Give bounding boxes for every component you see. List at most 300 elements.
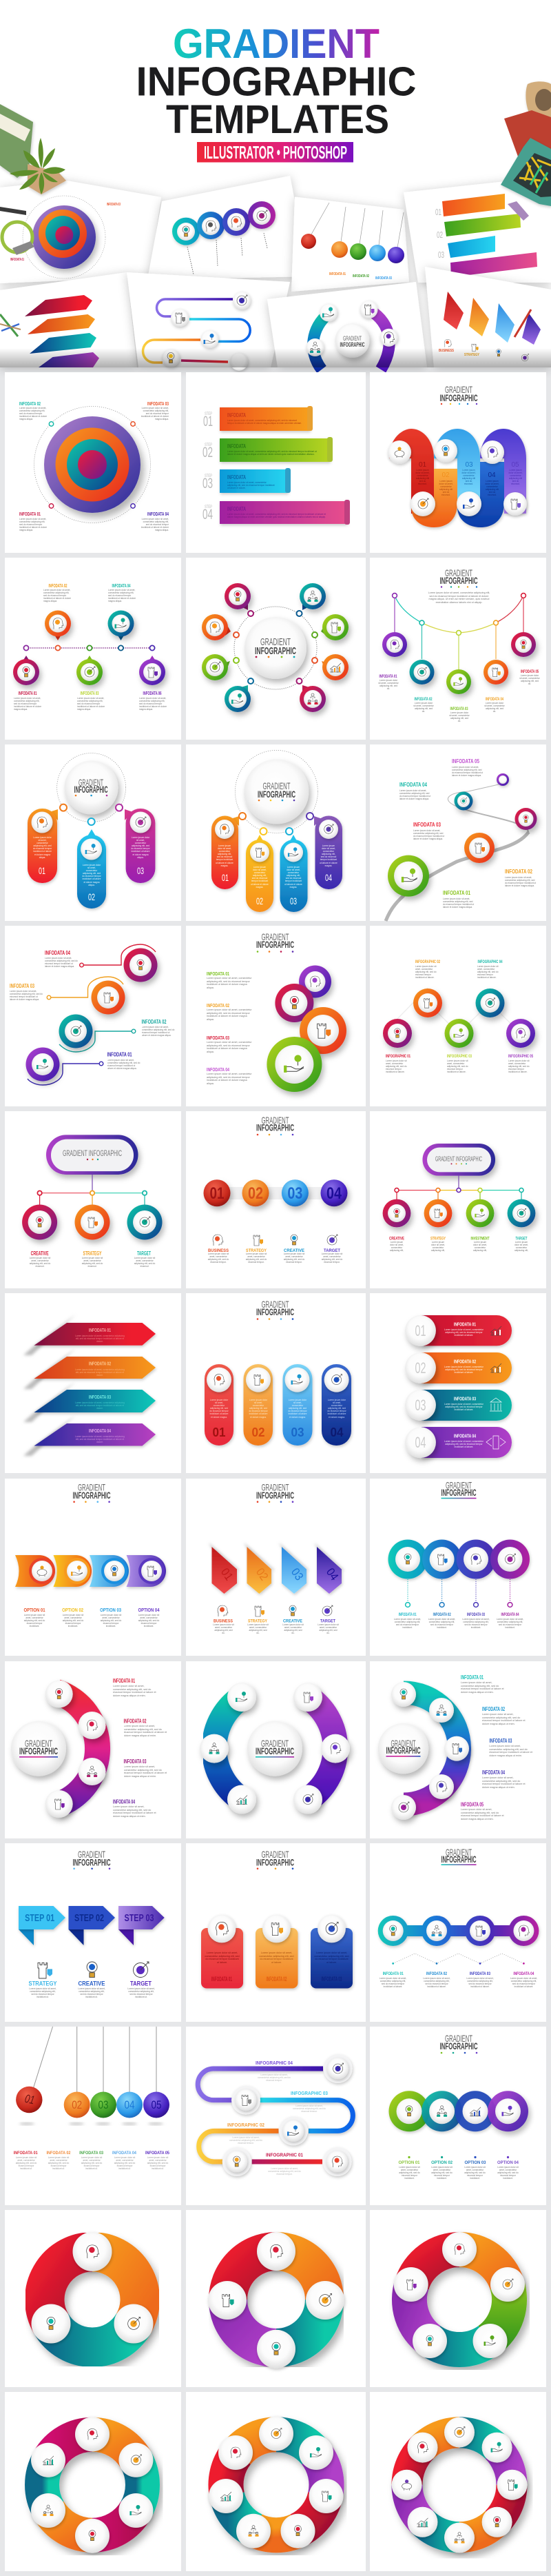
cylinder 04 bbox=[127, 1555, 166, 1587]
label 04 bbox=[141, 512, 169, 532]
box 02: Lorem ipsum dolor sit amet, consectetur adipiscing elit, sed do eiusmod tempor incididunt ut labore. bbox=[259, 1951, 294, 1963]
panel: stair circles bbox=[5, 926, 181, 1106]
heading: GRADIENT bbox=[262, 1299, 289, 1310]
sphere 05: 05 bbox=[152, 2098, 161, 2111]
template sheet: folded tags: BUSINESS bbox=[439, 349, 455, 353]
box 01: Lorem ipsum dolor sit amet, consectetur adipiscing elit, sed do eiusmod tempor incididunt ut labore. bbox=[205, 1951, 240, 1963]
label 02 bbox=[505, 869, 537, 891]
label 04: Lorem ipsum dolor sit amet, consectetur adipiscing elit, sed do eiusmod tempor. bbox=[258, 2073, 291, 2082]
arc band bbox=[56, 1692, 98, 1805]
ball 04 bbox=[324, 2054, 353, 2083]
label 01: INFODATA 01 bbox=[383, 1971, 404, 1976]
center ball: GRADIENT bbox=[391, 1738, 416, 1749]
inner ball 04 bbox=[495, 2098, 521, 2124]
heading: GRADIENT bbox=[78, 1482, 105, 1493]
capsule 01 bbox=[205, 1364, 233, 1446]
step 05 ball bbox=[481, 440, 504, 464]
label 03: INFODATA 03 bbox=[467, 1613, 485, 1617]
label option 03: Lorem ipsum dolor sit amet, consectetur adipiscing elit, sed do eiusmod tempor incididunt. bbox=[101, 1614, 121, 1627]
hub ball bbox=[65, 761, 118, 815]
ball 02 bbox=[413, 988, 442, 1017]
nodes bbox=[239, 813, 313, 835]
sphere 03 bbox=[282, 1179, 309, 1206]
template sheet: angled arrows bbox=[0, 272, 137, 367]
circle 04 bbox=[488, 2091, 528, 2131]
band numbers: 05 bbox=[511, 461, 519, 469]
panel: road path bbox=[370, 744, 546, 921]
template sheet: circle chain bbox=[147, 176, 309, 280]
label 03: INFODATA 03 bbox=[413, 822, 441, 828]
label 06: Lorem ipsum dolor sit amet, consectetur adipiscing elit, sed do eiusmod tempor incididunt ut labore et dolore magna aliqua. bbox=[139, 697, 167, 711]
label 03: Lorem ipsum dolor sit amet, consectetur adipiscing elit, sed do eiusmod tempor incididunt ut labore et dolore magna aliqua. bbox=[413, 829, 444, 840]
row 04: INFODATA 04 bbox=[454, 1434, 476, 1439]
label 02: Lorem ipsum dolor sit amet, consectetur adipiscing elit, sed do. bbox=[413, 702, 434, 713]
donut segments bbox=[409, 2250, 510, 2350]
pill 02 bbox=[246, 835, 273, 912]
label 02: INFODATA 02 bbox=[433, 1613, 451, 1617]
panel: four spheres bbox=[186, 1111, 366, 1288]
panel: ring chain with drops bbox=[370, 1479, 546, 1656]
label 05: INFODATA 05 bbox=[461, 1802, 484, 1807]
capsule 02: 02 bbox=[252, 1426, 264, 1439]
column creative: Lorem ipsum dolor sit amet, consectetur adipiscing elit, sed do. bbox=[282, 1623, 304, 1634]
nodes bbox=[37, 1191, 147, 1195]
panel: folded tags bbox=[186, 1479, 366, 1656]
path segment 03 bbox=[260, 2100, 353, 2131]
label 04: Lorem ipsum dolor sit amet, consectetur adipiscing elit, sed do eiusmod tempor incididunt ut labore et dolore magna aliqua. bbox=[45, 957, 78, 968]
label 03: Lorem ipsum dolor sit amet, consectetur adipiscing elit, sed do eiusmod tempor incididunt ut labore et dolore magna aliqua ut enim. bbox=[124, 1765, 167, 1777]
template sheet: pendulum: INFODATA 03 bbox=[375, 276, 392, 281]
ribbon 04 bbox=[202, 500, 350, 525]
label 03: INFODATA 03 bbox=[450, 707, 468, 711]
panel: org chart four bbox=[370, 1111, 546, 1288]
ball 02 bbox=[279, 2116, 308, 2145]
inner ball 02 bbox=[429, 2098, 455, 2124]
arrow step 01: STEP 01 bbox=[25, 1912, 54, 1924]
label 05: Lorem ipsum dolor sit amet, consectetur adipiscing elit, sed do eiusmod tempor incididunt ut labore et dolore magna aliqua ut enim. bbox=[461, 1808, 504, 1820]
capsule 03: Lorem ipsum dolor sit amet, consectetur adipiscing elit, sed do eiusmod tempor incididunt ut labore et dolore magna. bbox=[288, 1399, 307, 1419]
band numbers: 03 bbox=[465, 461, 473, 469]
panel: half ring five bbox=[370, 1661, 546, 1838]
ball 6 bbox=[293, 1785, 322, 1814]
pill 02: 02 bbox=[256, 895, 263, 906]
label 02: Lorem ipsum dolor sit amet, consectetur adipiscing elit, sed do eiusmod tempor incididunt ut labore et dolore magna aliqua ut enim. bbox=[124, 1725, 167, 1737]
label 01 bbox=[386, 1055, 410, 1076]
label 03: INFODATA 03 bbox=[79, 2151, 104, 2156]
column target: Lorem ipsum dolor sit amet, consectetur adipiscing elit, sed do eiusmod tempor incididunt ut. bbox=[127, 1987, 155, 1998]
row 01: Lorem ipsum dolor sit amet, consectetur adipiscing elit, sed do eiusmod tempor incididunt ut labore. bbox=[444, 1328, 484, 1337]
arrow step 01 bbox=[19, 1906, 65, 1945]
label 04: Lorem ipsum dolor sit amet, consectetur adipiscing elit, sed do eiusmod tempor incididunt ut labore et dolore magna aliqua. bbox=[108, 589, 136, 602]
label option 04: Lorem ipsum dolor sit amet, consectetur adipiscing elit, sed do eiusmod tempor incididunt. bbox=[138, 1614, 159, 1627]
arrow 04: INFODATA 04 bbox=[89, 1429, 111, 1434]
ball 02 bbox=[79, 1712, 106, 1739]
bottom fade bbox=[0, 348, 551, 367]
label option 03: OPTION 03 bbox=[464, 2160, 486, 2165]
column business: Lorem ipsum dolor sit amet, consectetur adipiscing elit, sed do eiusmod tempor. bbox=[208, 1252, 229, 1264]
ball 3 bbox=[227, 1785, 256, 1814]
step 03 ball bbox=[434, 439, 457, 463]
row 04: 04 bbox=[415, 1434, 426, 1451]
label option 04: Lorem ipsum dolor sit amet, consectetur adipiscing elit, sed do eiusmod tempor incididunt. bbox=[497, 2166, 519, 2180]
donut segments bbox=[42, 2435, 143, 2535]
box 03: Lorem ipsum dolor sit amet, consectetur adipiscing elit, sed do eiusmod tempor incididunt ut labore. bbox=[314, 1951, 349, 1963]
badge: illustrator photoshop bbox=[197, 142, 353, 163]
step 02 ball bbox=[410, 491, 435, 516]
label 05 bbox=[145, 2151, 170, 2174]
heading: INFOGRAPHIC bbox=[439, 575, 478, 586]
band text bbox=[415, 469, 523, 497]
road bbox=[386, 784, 529, 921]
sphere 04: 04 bbox=[326, 1184, 342, 1203]
column strategy: STRATEGY bbox=[248, 1619, 268, 1624]
ball head bbox=[257, 2232, 295, 2271]
ball chart bbox=[31, 2443, 65, 2477]
label 01: Lorem ipsum dolor sit amet, consectetur adipiscing elit, sed do eiusmod tempor incididunt ut labore et dolore magna aliqua. bbox=[19, 518, 47, 531]
box 01 bbox=[201, 1915, 243, 1988]
label option 04: OPTION 04 bbox=[497, 2160, 519, 2165]
ball target bbox=[114, 2304, 153, 2344]
panel: donut three bbox=[5, 2210, 181, 2387]
tag 02: 02 bbox=[253, 1565, 271, 1583]
ball 03 bbox=[470, 1920, 490, 1941]
label target bbox=[512, 1237, 530, 1252]
desk: green notebook bbox=[0, 104, 33, 178]
ball bulb bbox=[257, 2330, 295, 2369]
badge: illustrator photoshop: ILLUSTRATOR • PHOTOSHOP bbox=[204, 142, 347, 163]
ribbon 02: STEP bbox=[205, 443, 212, 447]
desk: teal pencil box bbox=[501, 138, 551, 206]
inner ball 01 bbox=[397, 2098, 422, 2124]
label target: Lorem ipsum dolor sit amet, consectetur adipiscing elit, sed do eiusmod. bbox=[134, 1257, 155, 1268]
ribbon 04: INFODATA bbox=[227, 506, 246, 512]
center ball: INFOGRAPHIC bbox=[19, 1745, 58, 1756]
pill 01: Lorem ipsum dolor sit amet, consectetur adipiscing elit, sed do eiusmod tempor incididunt ut labore et dolore magna. bbox=[216, 844, 233, 867]
donut segments bbox=[407, 2433, 512, 2537]
ribbon 04: Lorem ipsum dolor sit amet, consectetur adipiscing elit, sed do eiusmod tempor incididunt ut labore et dolore magna aliqua ut enim ad minim veniam quis nostrud exercitation ullamco laboris nisi ut aliquip. bbox=[227, 513, 326, 518]
label 02 bbox=[415, 960, 440, 982]
label 03 bbox=[291, 2091, 328, 2112]
ball rook bbox=[497, 2470, 528, 2500]
pin 03 bbox=[76, 656, 103, 685]
label 02: Lorem ipsum dolor sit amet, consectetur adipiscing elit, sed do eiusmod tempor incididunt. bbox=[428, 1618, 455, 1629]
label option 01: OPTION 01 bbox=[398, 2160, 420, 2165]
desk: wooden bowl bbox=[526, 81, 551, 125]
arrow 02: Lorem ipsum dolor sit amet, consectetur adipiscing elit, sed do eiusmod tempor incididunt ut labore et dolore. bbox=[75, 1368, 125, 1377]
label 01: Lorem ipsum dolor sit amet, consectetur adipiscing elit, sed do eiusmod tempor incididunt ut labore et dolore magna aliqua ut enim. bbox=[113, 1685, 156, 1697]
label 04: Lorem ipsum dolor sit amet, consectetur adipiscing elit, sed do eiusmod tempor incididunt ut labore. bbox=[477, 965, 498, 979]
panel: half ring right bbox=[5, 1661, 181, 1838]
label 05 bbox=[508, 1055, 533, 1076]
label 01: INFODATA 01 bbox=[107, 1052, 132, 1057]
tag 02 bbox=[247, 1547, 271, 1594]
label 04: INFODATA 04 bbox=[486, 698, 503, 702]
label 02: Lorem ipsum dolor sit amet, consectetur adipiscing elit, sed do eiusmod tempor incididunt ut labore. bbox=[423, 1977, 450, 1988]
label 04: INFODATA 04 bbox=[147, 512, 169, 517]
label creative: Lorem ipsum dolor sit amet, consectetur adipiscing elit, sed do eiusmod. bbox=[30, 1257, 50, 1268]
ball rook bbox=[394, 2267, 428, 2302]
label 04 bbox=[509, 1971, 539, 1993]
label 02: Lorem ipsum dolor sit amet, consectetur adipiscing elit, sed do eiusmod tempor incididunt ut. bbox=[48, 2156, 69, 2170]
ball end bbox=[323, 2147, 352, 2176]
strings bbox=[33, 2027, 156, 2093]
template sheet: ribbons: 02 bbox=[437, 230, 443, 240]
label 05 bbox=[461, 1802, 505, 1823]
arrow 03: INFODATA 03 bbox=[89, 1395, 111, 1400]
label 02 bbox=[124, 1718, 168, 1741]
sphere 02 bbox=[242, 1179, 269, 1206]
capsule 01: 01 bbox=[212, 1426, 226, 1439]
label 01: INFODATA 01 bbox=[18, 691, 37, 696]
pill 04: Lorem ipsum dolor sit amet, consectetur adipiscing elit, sed do eiusmod tempor incididunt ut labore et dolore magna. bbox=[320, 844, 337, 867]
template sheet: half-ring arcs: GRADIENT bbox=[343, 335, 362, 342]
pill 03: Lorem ipsum dolor sit amet, consectetur adipiscing elit, sed do eiusmod tempor incididunt ut labore et dolore magna. bbox=[284, 866, 302, 889]
label 05 bbox=[519, 670, 540, 687]
sphere 01: 01 bbox=[23, 2092, 36, 2107]
heading: INFOGRAPHIC bbox=[439, 2040, 478, 2051]
right arc bbox=[308, 1697, 335, 1799]
label 02 bbox=[428, 1613, 456, 1632]
row 01: INFODATA 01 bbox=[454, 1322, 476, 1328]
label 02: Lorem ipsum dolor sit amet, consectetur adipiscing elit, sed do eiusmod tempor incididunt ut labore et dolore magna aliqua. bbox=[505, 876, 536, 887]
title: gradient: GRADIENT bbox=[173, 21, 380, 67]
desk: green watch bbox=[2, 222, 34, 255]
label 02: Lorem ipsum dolor sit amet, consectetur adipiscing elit, sed do eiusmod tempor incididunt ut labore et dolore magna aliqua. bbox=[19, 407, 47, 420]
row 04: Lorem ipsum dolor sit amet, consectetur adipiscing elit, sed do eiusmod tempor incididunt ut labore. bbox=[444, 1440, 484, 1448]
row 02: Lorem ipsum dolor sit amet, consectetur adipiscing elit, sed do eiusmod tempor incididunt ut labore. bbox=[444, 1366, 484, 1374]
panel: three pills and hub bbox=[5, 744, 181, 921]
label 02: INFODATA 02 bbox=[19, 402, 41, 407]
ribbon 01: INFODATA bbox=[227, 412, 246, 418]
hub ball: INFOGRAPHIC bbox=[255, 645, 296, 657]
ball 02 bbox=[409, 660, 434, 684]
label 03 bbox=[447, 1055, 472, 1076]
ball bulb bbox=[413, 2324, 447, 2358]
label 03 bbox=[466, 1971, 495, 1993]
pill 01: 01 bbox=[222, 872, 229, 883]
label option 04 bbox=[496, 2156, 520, 2183]
label 03 bbox=[489, 1738, 533, 1760]
label 04: INFODATA 04 bbox=[482, 1769, 505, 1776]
heading bbox=[441, 1847, 477, 1865]
panel: four pills and hub bbox=[186, 744, 366, 921]
label 04: Lorem ipsum dolor sit amet, consectetur adipiscing elit, sed do eiusmod tempor incididunt ut labore et dolore magna aliqua. bbox=[207, 1073, 252, 1085]
row 04 bbox=[405, 1427, 512, 1458]
ball 01 bbox=[388, 855, 429, 897]
label 04: INFOGRAPHIC 04 bbox=[478, 960, 503, 964]
label 01: Lorem ipsum dolor sit amet, consectetur adipiscing elit, sed do eiusmod tempor incididunt ut labore. bbox=[380, 1977, 406, 1988]
label 04 bbox=[207, 1066, 252, 1087]
ball 05 bbox=[497, 773, 509, 786]
label target: TARGET bbox=[515, 1237, 528, 1241]
panel: donut four bbox=[186, 2210, 366, 2387]
step 06 ball bbox=[503, 492, 527, 516]
label 03: Lorem ipsum dolor sit amet, consectetur adipiscing elit, sed do eiusmod tempor incididunt ut. bbox=[81, 2156, 102, 2170]
label 04 bbox=[112, 2151, 137, 2174]
label 04: INFODATA 04 bbox=[207, 1066, 230, 1073]
heading: GRADIENT bbox=[446, 1479, 472, 1490]
ball 04 bbox=[429, 1774, 454, 1799]
hub ball: GRADIENT bbox=[263, 780, 291, 791]
label 03: Lorem ipsum dolor sit amet, consectetur adipiscing elit, sed do eiusmod tempor incididunt ut labore et dolore magna aliqua. bbox=[141, 407, 169, 420]
label strategy: STRATEGY bbox=[430, 1237, 446, 1241]
panel: donut five bbox=[370, 2210, 546, 2387]
band text: Lorem ipsum dolor sit amet, consectetur adipiscing elit sed do eiusmod. bbox=[415, 469, 430, 485]
heading: GRADIENT bbox=[445, 384, 472, 395]
drop lines bbox=[395, 596, 523, 669]
tag 04: 04 bbox=[324, 1565, 341, 1583]
label target: TARGET bbox=[137, 1250, 151, 1257]
label 03: Lorem ipsum dolor sit amet, consectetur adipiscing elit, sed do eiusmod tempor incididunt ut labore et dolore magna aliqua ut enim. bbox=[489, 1745, 532, 1756]
capsule 03 bbox=[282, 1364, 313, 1446]
panel: donut eight bbox=[370, 2392, 546, 2571]
label 01 bbox=[443, 890, 475, 912]
fold shadows bbox=[23, 1315, 76, 1456]
panel: cylinder options bbox=[5, 1479, 181, 1656]
band text: Lorem ipsum dolor sit amet, consectetur adipiscing elit sed do eiusmod. bbox=[485, 480, 499, 496]
pin lower left bbox=[202, 654, 230, 680]
heading: INFOGRAPHIC bbox=[256, 1122, 294, 1133]
panel: slanted arrows bbox=[5, 1293, 181, 1473]
connectors bbox=[397, 1176, 521, 1199]
template sheet: folded tags: STRATEGY bbox=[464, 353, 480, 357]
column strategy: Lorem ipsum dolor sit amet, consectetur adipiscing elit, sed do eiusmod tempor incididunt ut. bbox=[29, 1987, 56, 1998]
panel: numbered capsules bbox=[186, 1293, 366, 1473]
left arc bbox=[214, 1697, 242, 1799]
label 06: INFODATA 06 bbox=[143, 691, 162, 696]
path segment 04 bbox=[198, 2069, 323, 2100]
arc band bbox=[404, 1693, 459, 1805]
heading: INFOGRAPHIC bbox=[256, 1306, 294, 1317]
label 02 bbox=[227, 2123, 264, 2144]
ball 03 bbox=[445, 1019, 474, 1048]
label 02: INFODATA 02 bbox=[415, 698, 433, 702]
label 05: INFODATA 05 bbox=[452, 758, 479, 764]
pin upper right bbox=[321, 614, 349, 640]
heading bbox=[439, 567, 478, 588]
column creative: Lorem ipsum dolor sit amet, consectetur adipiscing elit, sed do eiusmod tempor. bbox=[284, 1252, 304, 1264]
heading bbox=[73, 1482, 110, 1503]
label strategy: STRATEGY bbox=[83, 1250, 102, 1257]
pill 04 bbox=[314, 816, 342, 889]
ring 01 bbox=[388, 1540, 427, 1579]
row 02: INFODATA 02 bbox=[454, 1359, 476, 1365]
column creative: CREATIVE bbox=[283, 1619, 303, 1624]
ring nodes bbox=[233, 611, 318, 684]
label 02: INFODATA 02 bbox=[482, 1706, 505, 1712]
panel: hub with eight pins bbox=[186, 558, 366, 740]
row 01 bbox=[405, 1315, 512, 1346]
pin 02 bbox=[45, 611, 71, 640]
heading: GRADIENT bbox=[262, 931, 289, 942]
panel: split ring bbox=[186, 1661, 366, 1838]
ball 4 bbox=[293, 1683, 322, 1712]
ball 05 bbox=[511, 632, 536, 657]
label option 03 bbox=[98, 1608, 123, 1631]
label 04 bbox=[482, 1769, 526, 1792]
circle 02 bbox=[422, 2091, 462, 2131]
ball strategy bbox=[424, 1199, 452, 1227]
pin bottom right bbox=[300, 685, 326, 712]
label 02: Lorem ipsum dolor sit amet, consectetur adipiscing elit, sed do eiusmod tempor incididunt ut labore et dolore magna aliqua. bbox=[142, 1026, 174, 1037]
label 03: INFOGRAPHIC 03 bbox=[291, 2091, 328, 2096]
label 02: INFOGRAPHIC 02 bbox=[227, 2123, 264, 2128]
ball 01 bbox=[267, 1037, 322, 1092]
capsule 02 bbox=[244, 1364, 273, 1446]
column strategy bbox=[247, 1606, 269, 1636]
chain band bbox=[378, 1916, 539, 1946]
ball 01 bbox=[391, 1682, 416, 1707]
label 01: Lorem ipsum dolor sit amet, consectetur adipiscing elit, sed do eiusmod tempor incididunt ut labore et dolore magna aliqua. bbox=[207, 977, 252, 988]
connector 03 bbox=[47, 977, 123, 1000]
label 02 bbox=[142, 1019, 175, 1043]
heading bbox=[441, 1479, 477, 1499]
label investment: INVESTMENT bbox=[471, 1237, 490, 1241]
ball 2 bbox=[200, 1734, 229, 1763]
panel: growing circles bbox=[186, 926, 366, 1106]
label 03: INFODATA 03 bbox=[470, 1971, 490, 1976]
tag 01 bbox=[212, 1547, 237, 1594]
panel: three rounded boxes bbox=[186, 1843, 366, 2022]
template sheet: ribbons: 01 bbox=[435, 207, 441, 217]
panel: wave bands bbox=[370, 372, 546, 553]
pill 01: 01 bbox=[39, 865, 45, 876]
label 01: INFOGRAPHIC 01 bbox=[266, 2153, 303, 2158]
ribbon 04: 04 bbox=[202, 507, 213, 523]
ball team bbox=[444, 2523, 475, 2553]
label 01 bbox=[14, 2151, 39, 2174]
ring 02 bbox=[422, 1540, 461, 1579]
panel: hanging curve bbox=[370, 558, 546, 740]
cylinder 01 bbox=[15, 1555, 55, 1587]
label 03: Lorem ipsum dolor sit amet, consectetur adipiscing elit, sed do eiusmod tempor incididunt ut labore. bbox=[466, 1977, 494, 1988]
arrow 02: INFODATA 02 bbox=[89, 1362, 111, 1366]
label 01 bbox=[378, 1971, 408, 1993]
pill 03: Lorem ipsum dolor sit amet, consectetur adipiscing elit, sed do eiusmod tempor incididunt ut labore et dolore magna aliqua. bbox=[131, 836, 150, 859]
pin upper left bbox=[202, 614, 231, 640]
sphere 02: 02 bbox=[72, 2098, 82, 2111]
label 02 bbox=[482, 1706, 526, 1728]
column creative bbox=[282, 1605, 304, 1636]
label 02: INFODATA 02 bbox=[426, 1971, 447, 1976]
label 02: INFODATA 02 bbox=[47, 2151, 71, 2156]
panel: horizontal capsules bbox=[370, 1293, 546, 1473]
heading: GRADIENT bbox=[445, 2033, 472, 2044]
label 03: Lorem ipsum dolor sit amet, consectetur adipiscing elit, sed do eiusmod tempor incididunt ut labore et dolore magna aliqua. bbox=[207, 1041, 252, 1053]
inner ball 03 bbox=[463, 2098, 488, 2124]
label 02 bbox=[207, 1002, 252, 1023]
label 04: Lorem ipsum dolor sit amet, consectetur adipiscing elit, sed do eiusmod tempor incididunt. bbox=[497, 1618, 523, 1629]
heading: GRADIENT bbox=[262, 1115, 289, 1126]
panel: zigzag circles bbox=[370, 926, 546, 1106]
ball 1 bbox=[227, 1683, 256, 1712]
label 05: Lorem ipsum dolor sit amet, consectetur adipiscing elit, sed do eiusmod tempor incididunt ut. bbox=[147, 2156, 168, 2170]
panel: donut seven bbox=[186, 2392, 366, 2571]
label creative: CREATIVE bbox=[31, 1250, 49, 1257]
ball 04 bbox=[124, 949, 157, 982]
center ball: INFOGRAPHIC bbox=[256, 1745, 294, 1756]
arrow step 02: STEP 02 bbox=[74, 1912, 104, 1924]
heading: INFOGRAPHIC bbox=[256, 1857, 294, 1868]
ring 04 bbox=[490, 1540, 530, 1579]
center ball bbox=[11, 1721, 66, 1776]
capsule heading: GRADIENT INFOGRAPHIC bbox=[435, 1156, 482, 1164]
ball bulb bbox=[281, 2514, 315, 2548]
label 04: INFODATA 04 bbox=[501, 1613, 519, 1617]
ring 03 bbox=[456, 1540, 496, 1579]
heading: GRADIENT bbox=[78, 1849, 105, 1860]
box 02: INFODATA 02 bbox=[266, 1976, 287, 1982]
